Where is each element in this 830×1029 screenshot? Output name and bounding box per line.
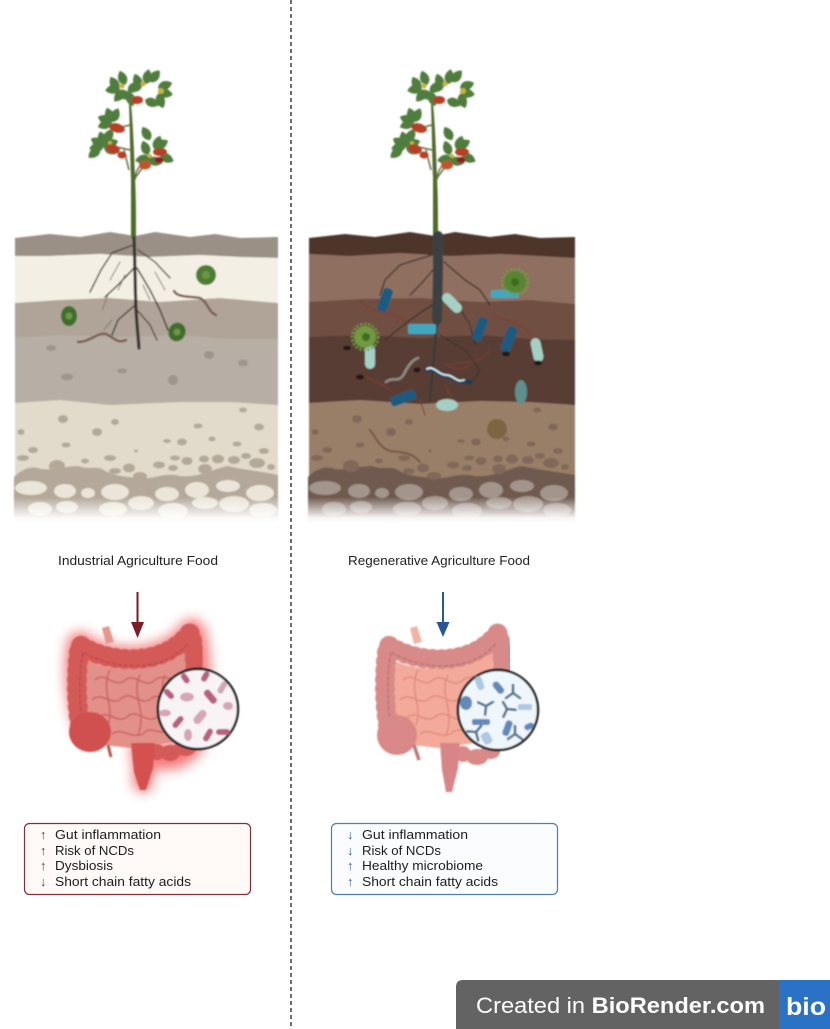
panel: regenerative outcomes bbox=[332, 824, 558, 894]
badge text: Created in BioRender.com bbox=[476, 993, 765, 1018]
heading: industrial agriculture food: Industrial Agriculture Food bbox=[58, 553, 218, 568]
soil layers: regenerative bbox=[308, 232, 575, 522]
sigmoid colon bbox=[149, 740, 196, 761]
outcome list: regenerative: Short chain fatty acids bbox=[362, 874, 498, 889]
arrow: regenerative down bbox=[436, 592, 450, 637]
rectum bbox=[440, 743, 460, 792]
Y-shaped microbes bbox=[467, 685, 522, 740]
outcome list: regenerative: Gut inflammation bbox=[362, 827, 468, 842]
outcome list: industrial: ↑ bbox=[40, 858, 46, 873]
plant: regenerative bbox=[388, 68, 477, 238]
heading: regenerative agriculture food: Regenerative Agriculture Food bbox=[348, 553, 530, 568]
outcome list: industrial: ↓ bbox=[40, 874, 46, 889]
outcome list: industrial: Risk of NCDs bbox=[55, 843, 134, 858]
spiky green microbes bbox=[352, 269, 528, 350]
magnifier: healthy microbes bbox=[458, 670, 538, 750]
round microbe bbox=[487, 419, 507, 439]
badge: created in biorender bbox=[456, 980, 830, 1029]
plant: industrial bbox=[86, 68, 175, 238]
dashed divider bbox=[290, 0, 292, 1029]
rectum bbox=[131, 743, 155, 790]
sigmoid colon bbox=[455, 745, 500, 765]
pale pink bacteria bbox=[159, 680, 233, 741]
outcome list: regenerative: ↑ bbox=[347, 874, 353, 889]
stones: regenerative bbox=[309, 408, 571, 519]
outcome list: industrial: Gut inflammation bbox=[55, 827, 161, 842]
panel: regenerative agriculture soil and plant bbox=[308, 68, 575, 522]
worm bbox=[370, 430, 420, 462]
dark pink bacteria bbox=[163, 670, 230, 743]
outcome list: regenerative: Healthy microbiome bbox=[362, 858, 483, 873]
intestine: inflamed bbox=[69, 626, 197, 790]
roots: regenerative bbox=[360, 236, 535, 415]
outcome list: industrial bbox=[40, 827, 191, 889]
outcome list: regenerative: ↓ bbox=[347, 827, 353, 842]
intestine: healthy bbox=[377, 626, 504, 792]
stones: industrial bbox=[15, 345, 277, 519]
rod bacteria bbox=[365, 287, 544, 411]
outcome list: regenerative bbox=[347, 827, 498, 889]
small intestine bbox=[392, 645, 500, 748]
large intestine bbox=[77, 633, 196, 740]
magnifier: dysbiotic microbes bbox=[158, 669, 238, 749]
arrow: industrial down bbox=[131, 592, 144, 638]
small intestine bbox=[84, 645, 192, 748]
badge logo text: bio bbox=[786, 993, 826, 1021]
large intestine bbox=[385, 633, 504, 740]
outcome list: regenerative: Risk of NCDs bbox=[362, 843, 441, 858]
outcome list: industrial: Short chain fatty acids bbox=[55, 874, 191, 889]
outcome list: industrial: ↑ bbox=[40, 827, 46, 842]
fade at bottom of soil bbox=[0, 497, 600, 525]
soil layers: industrial bbox=[14, 232, 278, 522]
outcome list: industrial: ↑ bbox=[40, 843, 46, 858]
outcome list: regenerative: ↓ bbox=[347, 843, 353, 858]
pale microbes bbox=[474, 675, 532, 746]
worms: industrial bbox=[78, 291, 216, 342]
panel: industrial agriculture soil and plant bbox=[14, 68, 278, 522]
microbes: regenerative bbox=[343, 269, 544, 462]
spirochetes bbox=[386, 358, 471, 382]
outcome list: regenerative: ↑ bbox=[347, 858, 353, 873]
outcome list: industrial: Dysbiosis bbox=[55, 858, 113, 873]
roots: industrial bbox=[90, 238, 170, 348]
panel: industrial outcomes bbox=[24, 824, 250, 894]
microbes: industrial bbox=[61, 265, 216, 344]
dark spores bbox=[343, 346, 542, 380]
rods and blobs bbox=[460, 680, 535, 737]
red glow bbox=[78, 632, 197, 782]
